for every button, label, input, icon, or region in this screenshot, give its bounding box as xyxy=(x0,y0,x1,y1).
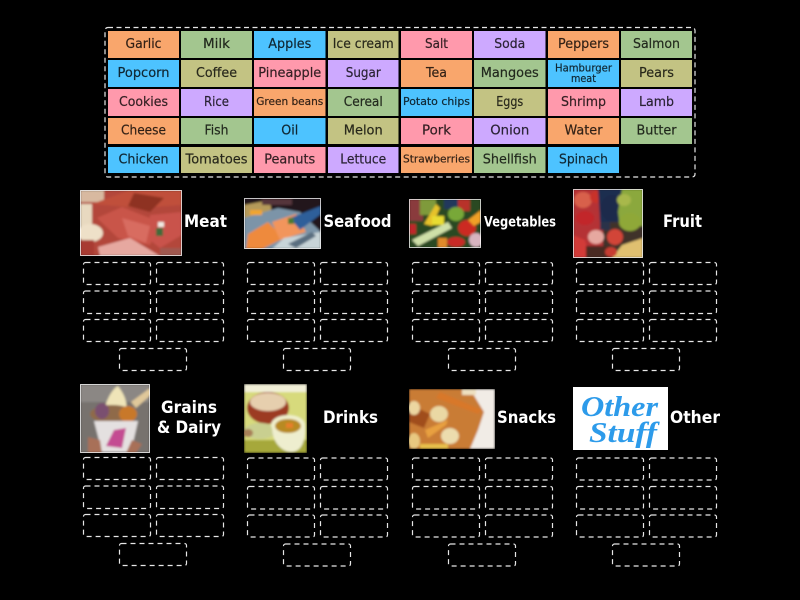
word tiles: Shellfish xyxy=(483,152,537,168)
drop slots: vegetables xyxy=(412,262,552,370)
panel: other category xyxy=(573,387,721,566)
word tiles: Hamburger xyxy=(555,62,613,74)
word tiles: Cereal xyxy=(344,95,383,110)
word tiles: Butter xyxy=(636,124,677,138)
drop slots: fruit xyxy=(576,262,716,370)
word tiles: Apples xyxy=(268,37,311,52)
image: Other Stuff logo: Other xyxy=(581,391,659,423)
word tiles: Peppers xyxy=(558,37,609,52)
heading: Snacks: Snacks xyxy=(497,408,556,427)
word tiles: Tomatoes xyxy=(185,152,248,168)
word tiles: Fish xyxy=(204,124,228,138)
word tiles: Cheese xyxy=(121,124,166,138)
word tiles: Ice cream xyxy=(333,37,394,52)
image: frozen yogurt cup xyxy=(80,384,152,453)
drop slots: grains and dairy xyxy=(84,458,224,566)
word tiles: Pineapple xyxy=(258,66,321,81)
word tiles: Lamb xyxy=(639,95,674,110)
word tiles: Popcorn xyxy=(118,66,170,81)
word tiles: Tea xyxy=(425,66,447,81)
word tiles: Shrimp xyxy=(561,95,606,110)
heading: Vegetables: Vegetables xyxy=(484,214,556,230)
panel: snacks category xyxy=(408,389,556,566)
panel: fruit category xyxy=(573,189,716,370)
panel: meat category xyxy=(77,190,227,370)
image: Other Stuff logo: Stuff xyxy=(589,417,661,449)
image: snack mix xyxy=(408,389,495,449)
word tiles: Green beans xyxy=(256,96,323,108)
drop slots: drinks xyxy=(248,458,388,566)
word tiles xyxy=(108,31,692,173)
word tiles: Spinach xyxy=(559,152,608,168)
heading: Other: Other xyxy=(670,408,721,427)
panel: grains and dairy category: & Dairy xyxy=(157,418,221,437)
word tiles: Milk xyxy=(203,37,230,52)
word tiles: Lettuce xyxy=(340,152,386,168)
word tiles: Oil xyxy=(281,124,298,138)
word tiles: Salmon xyxy=(633,37,680,52)
drop slots: meat xyxy=(84,262,224,370)
heading: Drinks: Drinks xyxy=(323,408,378,427)
image: Other Stuff logo xyxy=(573,387,668,450)
word tiles: Soda xyxy=(494,37,525,52)
panel: word bank xyxy=(105,28,695,177)
panel: drinks category xyxy=(243,384,388,566)
drop slots: other xyxy=(576,458,716,566)
word tiles: Onion xyxy=(490,124,529,138)
word tiles: Water xyxy=(564,124,603,138)
word tiles: Sugar xyxy=(346,66,381,81)
word tiles: Salt xyxy=(425,37,448,52)
panel: vegetables category xyxy=(409,199,556,370)
panel: seafood category xyxy=(244,198,392,370)
word tiles: Coffee xyxy=(196,66,237,81)
word tiles: Peanuts xyxy=(264,152,315,168)
word tiles: meat xyxy=(571,73,596,85)
heading: Grains & Dairy: Grains xyxy=(161,398,217,417)
word tiles: Strawberries xyxy=(403,154,470,166)
image: cups of tea xyxy=(243,384,307,453)
word tiles: Rice xyxy=(204,95,229,110)
word tiles: Mangoes xyxy=(481,66,539,81)
image: vegetables xyxy=(409,199,483,248)
heading: Seafood: Seafood xyxy=(324,212,392,231)
word tiles: Pears xyxy=(639,66,674,81)
word tiles: Chicken xyxy=(118,152,168,168)
word tiles: Melon xyxy=(344,124,383,138)
word tiles: Pork xyxy=(422,124,451,138)
heading: Fruit: Fruit xyxy=(663,212,702,231)
panel: grains and dairy category xyxy=(80,384,224,566)
image: meat xyxy=(77,190,182,256)
drop slots: seafood xyxy=(248,262,388,370)
heading: Meat: Meat xyxy=(184,212,227,231)
drop slots: snacks xyxy=(412,458,552,566)
word tiles: Potato chips xyxy=(403,96,470,108)
word tiles: Cookies xyxy=(119,95,168,110)
image: seafood xyxy=(244,198,321,249)
word tiles: Eggs xyxy=(496,95,523,110)
image: fruit xyxy=(573,189,643,258)
word tiles: Garlic xyxy=(126,37,162,52)
